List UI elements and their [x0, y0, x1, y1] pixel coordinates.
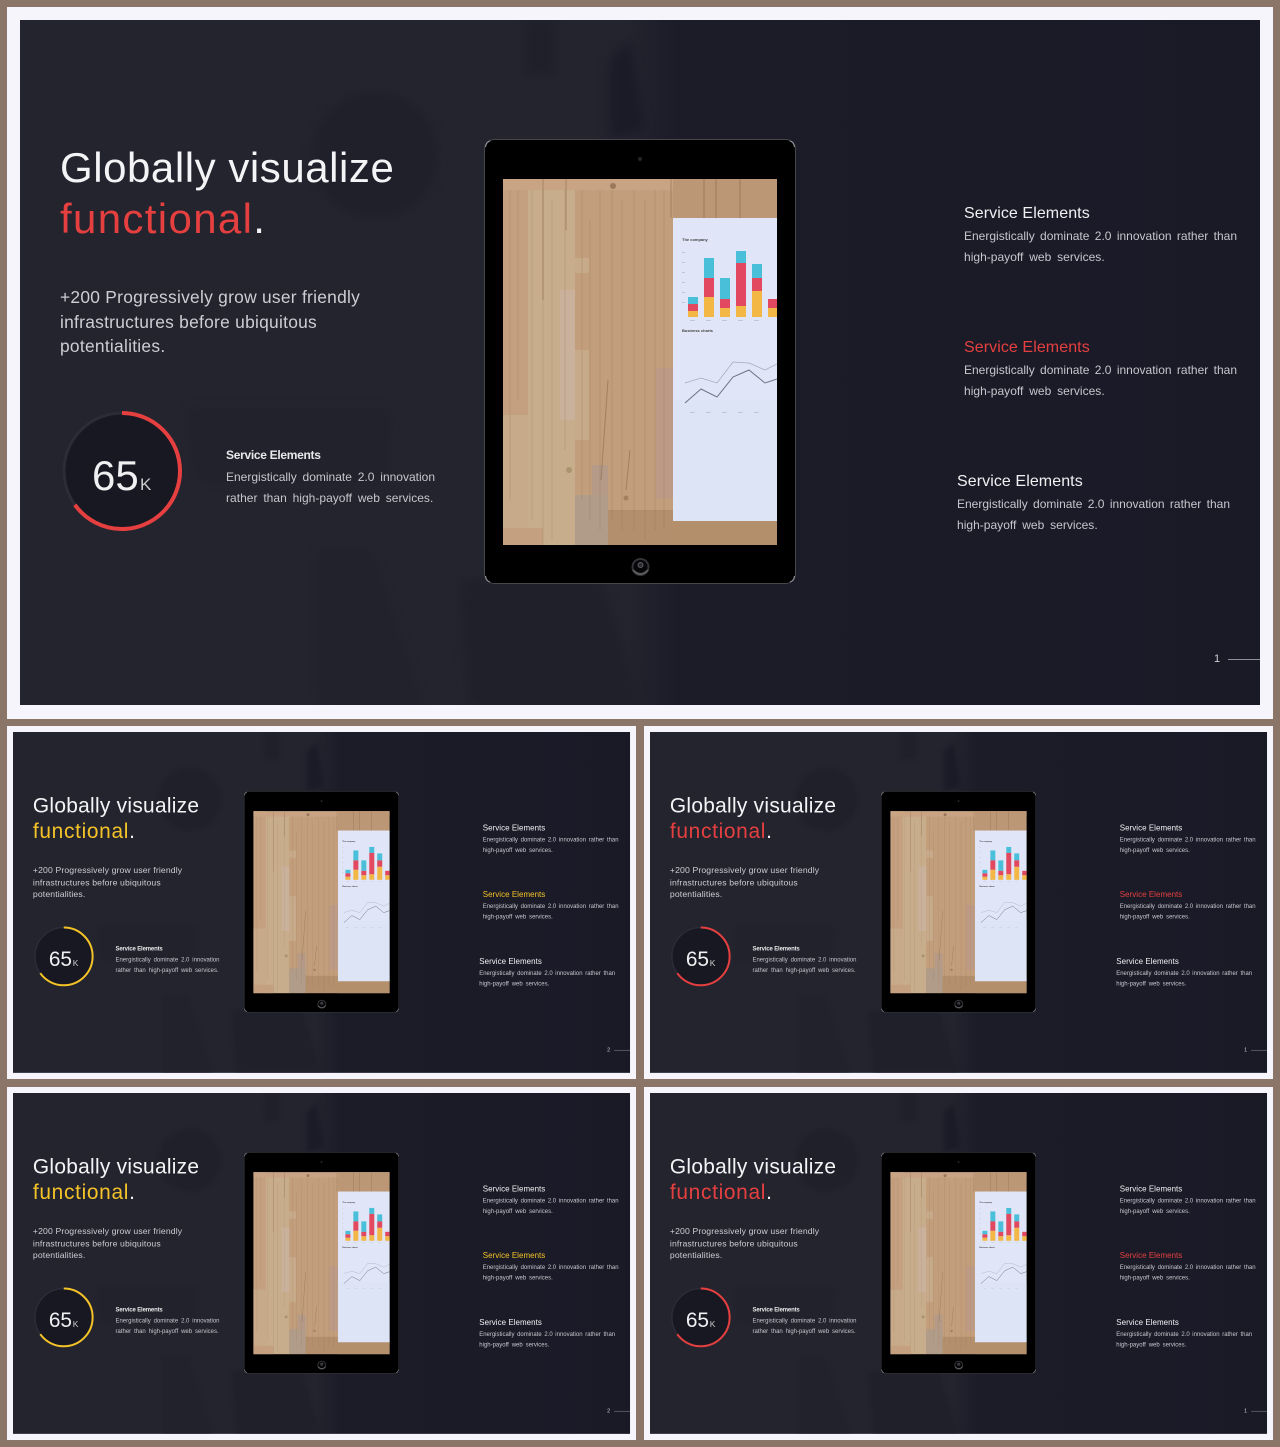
service item 2 highlighted: Energistically dominate 2.0 innovation rather than	[1120, 1264, 1256, 1271]
service item 3: Energistically dominate 2.0 innovation rather than	[479, 1330, 615, 1337]
service item 3	[479, 1318, 615, 1348]
service text beside ring: Service Elements	[116, 1306, 163, 1313]
service item 3: high-payoff web services.	[479, 1341, 549, 1348]
tablet with chart photo: Business charts	[979, 885, 996, 888]
panel: small slide frame top right	[644, 726, 1273, 1079]
service item 2 highlighted	[483, 891, 619, 920]
service item 1: high-payoff web services.	[483, 1207, 553, 1214]
service item 1: Service Elements	[483, 824, 545, 833]
service item 3: Energistically dominate 2.0 innovation rather than	[1116, 969, 1252, 976]
tablet with chart photo	[244, 1152, 399, 1374]
title: Globally visualize	[33, 1155, 199, 1178]
page number: 1	[1214, 653, 1220, 665]
service item 3: Energistically dominate 2.0 innovation rather than	[957, 497, 1230, 511]
service item 2 highlighted	[483, 1252, 619, 1281]
service item 2 highlighted: Service Elements	[483, 891, 545, 899]
service item 2 highlighted: Service Elements	[1120, 1252, 1182, 1260]
service item 1: Service Elements	[483, 1185, 545, 1194]
title: functional.	[33, 819, 135, 842]
service text beside ring: Energistically dominate 2.0 innovation	[226, 470, 435, 484]
service item 1	[483, 824, 619, 854]
service text beside ring	[116, 945, 220, 974]
progress ring 65K	[34, 1288, 94, 1348]
service item 3	[1116, 957, 1252, 987]
progress ring 65K: 65	[49, 948, 72, 971]
lead text	[33, 865, 182, 899]
tablet with chart photo: Business charts	[979, 1246, 996, 1249]
lead text: potentialities.	[670, 1250, 722, 1260]
tablet with chart photo	[484, 139, 796, 584]
tablet with chart photo	[881, 1152, 1036, 1374]
title: functional.	[60, 195, 266, 242]
service item 3: Service Elements	[957, 473, 1083, 490]
lead text: infrastructures before ubiquitous	[670, 1238, 798, 1248]
service text beside ring: Service Elements	[753, 945, 800, 952]
service item 2 highlighted: Service Elements	[964, 339, 1090, 356]
service item 3: high-payoff web services.	[1116, 1341, 1186, 1348]
lead text: infrastructures before ubiquitous	[33, 1238, 161, 1248]
service item 1	[964, 205, 1237, 264]
service item 2 highlighted	[964, 339, 1237, 398]
lead text: infrastructures before ubiquitous	[670, 877, 798, 887]
lead text: potentialities.	[33, 889, 85, 899]
service text beside ring: Energistically dominate 2.0 innovation	[116, 1317, 220, 1324]
lead text: potentialities.	[33, 1250, 85, 1260]
tablet with chart photo: The company	[342, 841, 356, 843]
panel: small red slide top right	[650, 732, 1267, 1073]
title: functional.	[670, 1180, 772, 1203]
lead text	[33, 1226, 182, 1260]
lead text	[60, 287, 360, 356]
service text beside ring	[226, 448, 435, 505]
progress ring 65K	[672, 1288, 731, 1348]
lead text	[670, 1226, 819, 1260]
page number: 1	[1244, 1047, 1247, 1053]
service item 3	[957, 473, 1230, 532]
tablet with chart photo: The company	[979, 841, 993, 843]
progress ring 65K	[34, 926, 94, 986]
service item 1: high-payoff web services.	[964, 250, 1105, 264]
panel: large slide frame	[7, 7, 1273, 719]
progress ring 65K: K	[140, 475, 152, 494]
service item 1	[1120, 824, 1256, 854]
service item 2 highlighted: high-payoff web services.	[483, 1274, 553, 1281]
tablet with chart photo: Business charts	[342, 1246, 359, 1249]
service item 1: Service Elements	[1120, 824, 1182, 833]
lead text: infrastructures before ubiquitous	[60, 312, 317, 332]
service text beside ring: rather than high-payoff web services.	[116, 966, 219, 973]
service text beside ring: rather than high-payoff web services.	[753, 966, 856, 973]
service item 2 highlighted	[1120, 891, 1256, 920]
service text beside ring	[752, 1306, 857, 1334]
panel: small slide frame top left	[7, 726, 636, 1079]
title: functional.	[33, 1180, 135, 1203]
progress ring 65K: 65	[686, 1309, 709, 1332]
service item 3: high-payoff web services.	[1116, 980, 1186, 987]
progress ring 65K: 65	[49, 1309, 72, 1332]
service item 3: high-payoff web services.	[957, 518, 1098, 532]
progress ring 65K: K	[710, 1319, 716, 1329]
tablet with chart photo	[244, 791, 399, 1012]
panel: small slide frame bottom right	[644, 1087, 1273, 1440]
service item 1: Energistically dominate 2.0 innovation rather than	[483, 836, 619, 843]
lead text: potentialities.	[60, 336, 165, 356]
service item 1	[483, 1185, 619, 1214]
lead text: infrastructures before ubiquitous	[33, 877, 161, 887]
service item 1: high-payoff web services.	[483, 846, 553, 853]
page number: 1	[1244, 1408, 1247, 1414]
service item 1: Service Elements	[964, 205, 1090, 222]
service item 1: Energistically dominate 2.0 innovation rather than	[1120, 1197, 1256, 1204]
service item 1: Energistically dominate 2.0 innovation rather than	[483, 1197, 619, 1204]
tablet with chart photo: The company	[682, 237, 709, 242]
title: Globally visualize	[33, 794, 199, 817]
service text beside ring: Service Elements	[226, 448, 321, 462]
service item 1	[1120, 1185, 1256, 1216]
title	[670, 794, 836, 842]
progress ring 65K: K	[73, 958, 79, 968]
service item 2 highlighted: Energistically dominate 2.0 innovation rather than	[964, 363, 1237, 377]
lead text: +200 Progressively grow user friendly	[670, 1226, 819, 1236]
panel: small slide frame bottom left	[7, 1087, 636, 1440]
service text beside ring: Energistically dominate 2.0 innovation	[753, 956, 857, 963]
tablet with chart photo: The company	[342, 1202, 356, 1204]
lead text: +200 Progressively grow user friendly	[60, 287, 360, 307]
page number: 2	[607, 1408, 610, 1414]
lead text: potentialities.	[670, 889, 722, 899]
service item 3	[1116, 1318, 1252, 1350]
service text beside ring: Energistically dominate 2.0 innovation	[753, 1317, 857, 1324]
service item 3	[479, 957, 615, 987]
panel: large red slide	[20, 20, 1260, 705]
service text beside ring	[116, 1306, 220, 1334]
tablet with chart photo: Business charts	[342, 885, 359, 888]
service item 3: Service Elements	[1116, 957, 1179, 966]
service text beside ring: rather than high-payoff web services.	[753, 1327, 856, 1334]
progress ring 65K	[672, 926, 731, 986]
service item 3: Service Elements	[479, 1318, 542, 1327]
tablet with chart photo: Business charts	[682, 328, 714, 333]
service item 1: Energistically dominate 2.0 innovation rather than	[1120, 836, 1256, 843]
progress ring 65K	[63, 411, 182, 531]
lead text: +200 Progressively grow user friendly	[33, 1226, 182, 1236]
service item 2 highlighted: Energistically dominate 2.0 innovation rather than	[1120, 903, 1256, 910]
lead text: +200 Progressively grow user friendly	[33, 865, 182, 875]
service item 1: Service Elements	[1120, 1185, 1182, 1194]
service item 1: high-payoff web services.	[1120, 846, 1190, 853]
title	[60, 144, 394, 242]
tablet with chart photo: The company	[979, 1202, 993, 1204]
service item 2 highlighted: Service Elements	[1120, 891, 1182, 899]
service item 2 highlighted: high-payoff web services.	[964, 384, 1105, 398]
service text beside ring	[752, 945, 857, 974]
service item 2 highlighted	[1120, 1251, 1256, 1283]
progress ring 65K: 65	[686, 948, 709, 971]
service text beside ring: Service Elements	[753, 1306, 800, 1313]
title	[33, 1155, 199, 1203]
title: functional.	[670, 819, 772, 842]
title: Globally visualize	[670, 794, 836, 817]
progress ring 65K: 65	[92, 452, 139, 499]
service item 2 highlighted: Service Elements	[483, 1252, 545, 1260]
service item 3: Service Elements	[1116, 1318, 1179, 1327]
service item 3: Service Elements	[479, 957, 542, 966]
service item 1: Energistically dominate 2.0 innovation rather than	[964, 229, 1237, 243]
service item 2 highlighted: high-payoff web services.	[483, 913, 553, 920]
page number: 2	[607, 1047, 610, 1053]
service text beside ring: rather than high-payoff web services.	[226, 491, 433, 505]
tablet with chart photo	[881, 791, 1036, 1012]
service text beside ring: Energistically dominate 2.0 innovation	[116, 956, 220, 963]
panel: small red slide bottom right	[650, 1093, 1267, 1434]
title: Globally visualize	[60, 144, 394, 191]
lead text: +200 Progressively grow user friendly	[670, 865, 819, 875]
lead text	[670, 865, 819, 899]
service item 3: Energistically dominate 2.0 innovation rather than	[1116, 1330, 1252, 1337]
service item 1: high-payoff web services.	[1120, 1207, 1190, 1214]
progress ring 65K: K	[73, 1319, 79, 1329]
service item 2 highlighted: Energistically dominate 2.0 innovation rather than	[483, 903, 619, 910]
service item 3: Energistically dominate 2.0 innovation rather than	[479, 969, 615, 976]
title	[670, 1155, 836, 1203]
service text beside ring: rather than high-payoff web services.	[116, 1327, 219, 1334]
progress ring 65K: K	[710, 958, 716, 968]
service item 2 highlighted: Energistically dominate 2.0 innovation rather than	[483, 1264, 619, 1271]
panel: small yellow slide bottom left	[13, 1093, 630, 1434]
panel: small yellow slide top left	[13, 732, 630, 1073]
service item 2 highlighted: high-payoff web services.	[1120, 1274, 1190, 1281]
service item 2 highlighted: high-payoff web services.	[1120, 913, 1190, 920]
title: Globally visualize	[670, 1155, 836, 1178]
service text beside ring: Service Elements	[116, 945, 163, 952]
title	[33, 794, 199, 842]
service item 3: high-payoff web services.	[479, 980, 549, 987]
